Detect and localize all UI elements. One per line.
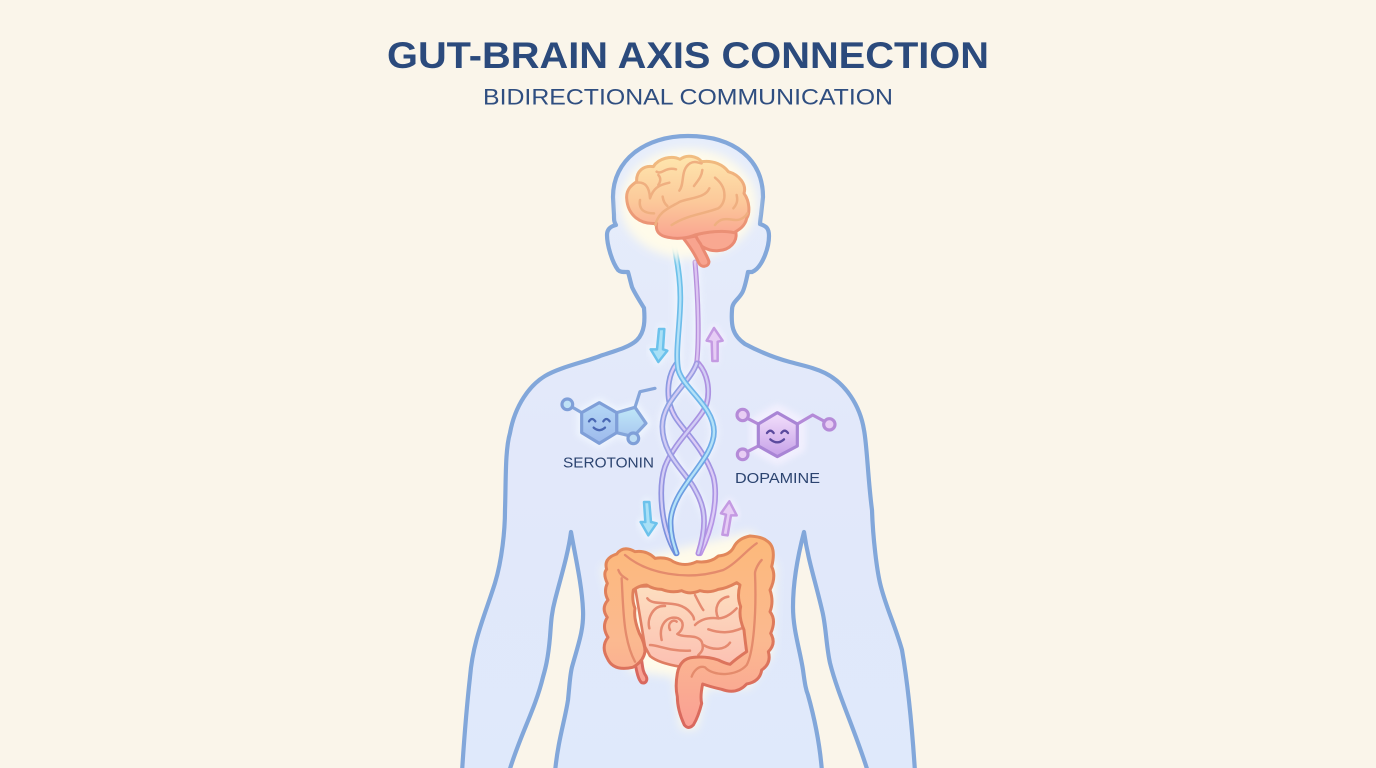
title: GUT-BRAIN AXIS CONNECTION (387, 35, 989, 76)
intestines (604, 536, 774, 727)
molecule halo (582, 403, 646, 443)
hexagon ring (582, 403, 617, 443)
cerebellum (695, 231, 736, 251)
large intestine (604, 536, 774, 727)
strand D (668, 363, 715, 553)
human body silhouette (462, 136, 915, 768)
vagus strand upper purple (695, 262, 698, 363)
brain (620, 148, 757, 266)
molecule halo (758, 413, 797, 457)
serotonin molecule (562, 388, 655, 444)
strand B (662, 363, 704, 553)
pentagon ring (617, 407, 646, 437)
small intestine folds (647, 595, 742, 655)
dopamine molecule (737, 409, 835, 460)
hexagon ring (758, 413, 797, 457)
nerve connection (661, 242, 715, 553)
atoms (737, 409, 835, 460)
arrow: down, upper left (651, 328, 667, 362)
gut halo (607, 536, 772, 725)
strand A (671, 242, 714, 553)
arrow: up, lower right (721, 501, 737, 535)
appendix (635, 661, 647, 683)
smiling face (589, 419, 610, 430)
brain halo (620, 148, 757, 258)
label: serotonin: SEROTONIN (563, 454, 654, 472)
arrow: down, lower left (641, 502, 657, 535)
smiling face (767, 431, 788, 442)
atoms (562, 399, 639, 444)
brain folds (637, 162, 747, 225)
arrow: up, upper right (707, 328, 723, 361)
small intestine (635, 583, 747, 667)
glow behind nerves (662, 243, 714, 520)
bonds (747, 415, 825, 452)
strand C (661, 363, 708, 553)
subtitle: BIDIRECTIONAL COMMUNICATION (483, 84, 893, 110)
large intestine inner lines (618, 543, 762, 677)
brain stem (683, 236, 709, 266)
cerebrum (627, 156, 749, 238)
side chain and link (573, 388, 655, 413)
label: dopamine: DOPAMINE (735, 470, 820, 487)
